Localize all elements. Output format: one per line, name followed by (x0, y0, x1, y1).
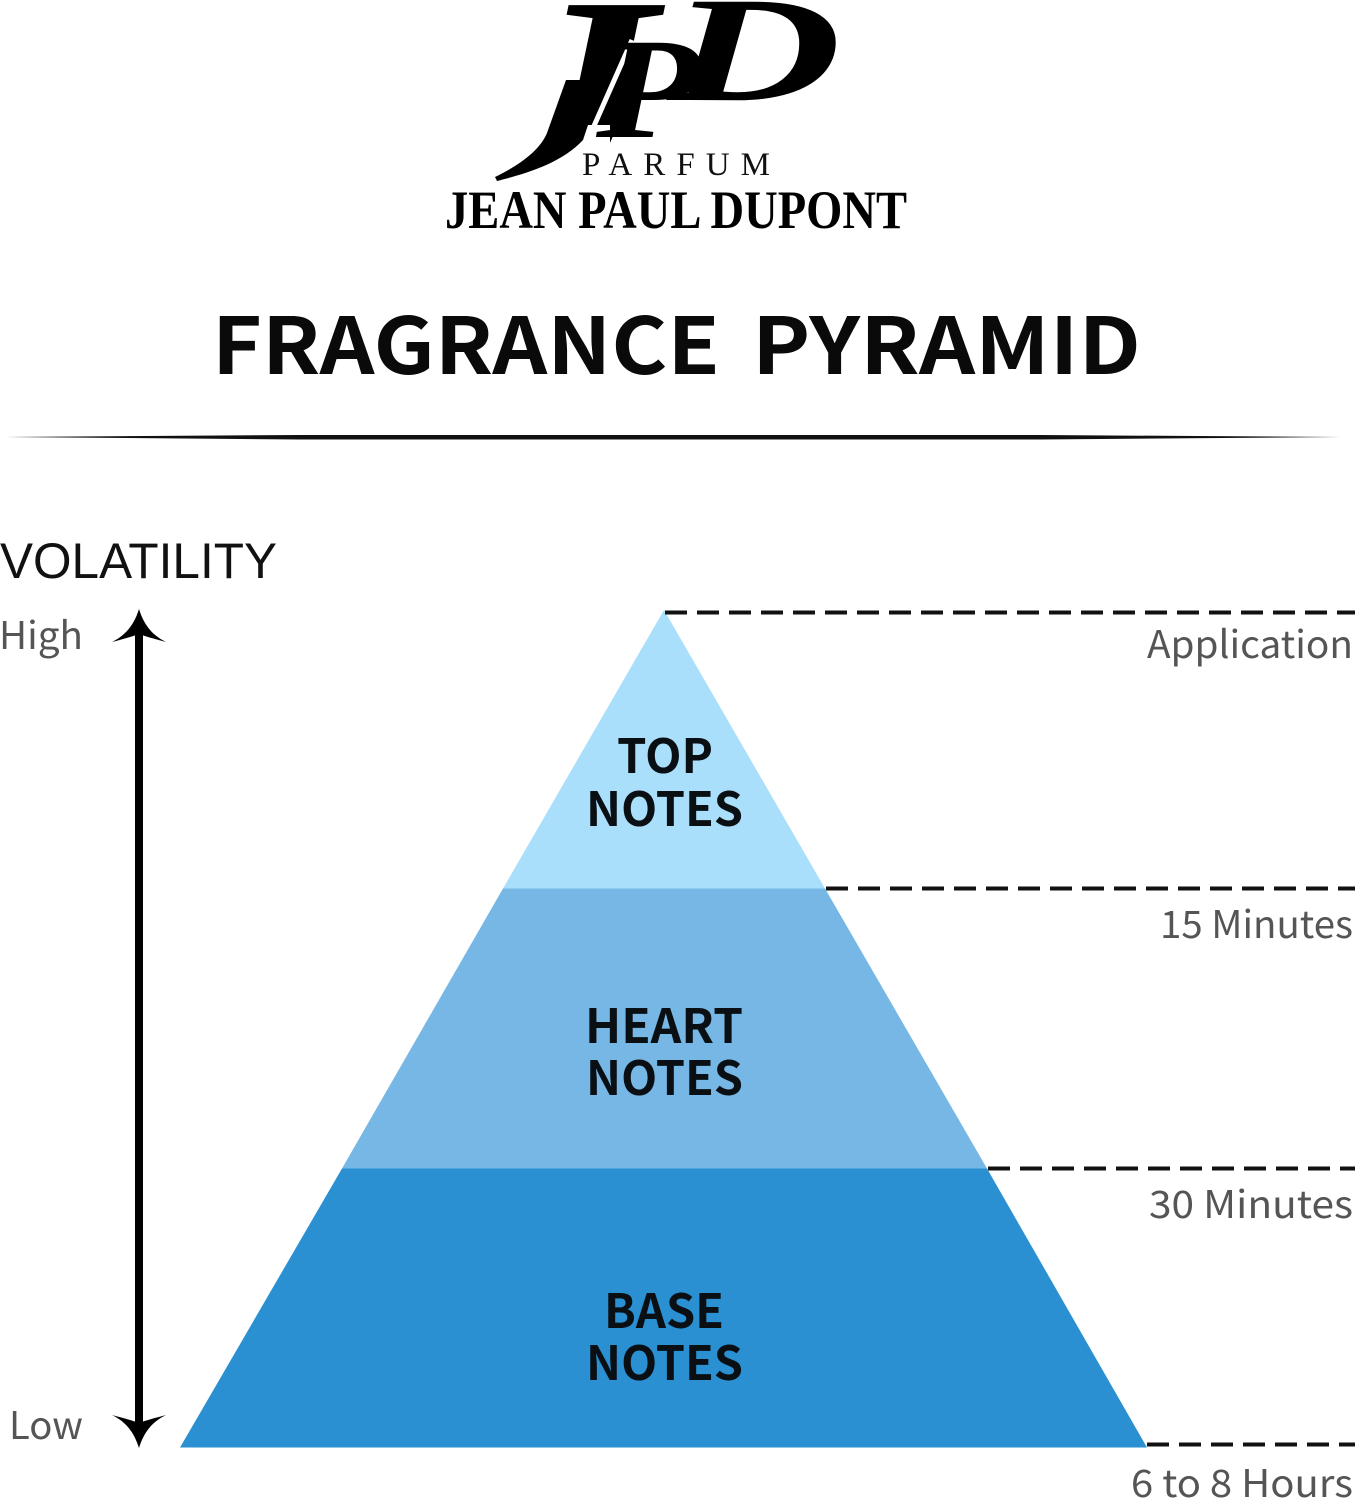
title: FRAGRANCE (212, 285, 720, 397)
pyramid (180, 610, 1147, 1448)
label: base notes (586, 1273, 743, 1394)
time label: application: Application (1147, 614, 1353, 669)
panel: heart notes (342, 888, 987, 1168)
volatility low label: Low (9, 1395, 83, 1450)
logo monogram P: P (595, 9, 702, 169)
time label: 15 minutes: 15 Minutes (1160, 894, 1353, 949)
label: base notes: NOTES (586, 1325, 743, 1394)
label: top notes: NOTES (586, 771, 743, 840)
label: heart notes: HEART (585, 988, 743, 1057)
title: PYRAMID (752, 285, 1141, 397)
label: top notes: TOP (617, 718, 713, 787)
volatility high label: High (0, 605, 83, 660)
label: heart notes: NOTES (586, 1040, 743, 1109)
title (212, 285, 1141, 397)
label: top notes (586, 718, 743, 840)
panel: base notes (180, 1168, 1147, 1448)
volatility heading: VOLATILITY (0, 533, 277, 589)
label: heart notes (585, 988, 743, 1109)
logo: Jean Paul Dupont (445, 0, 907, 240)
label: base notes: BASE (604, 1273, 724, 1342)
logo name: JEAN PAUL DUPONT (445, 180, 907, 240)
logo word PARFUM: PARFUM (582, 147, 770, 183)
divider (5, 435, 1340, 440)
time label: 30 minutes: 30 Minutes (1149, 1174, 1353, 1229)
panel: top notes (503, 610, 825, 888)
arrow: volatility axis (112, 609, 166, 1448)
